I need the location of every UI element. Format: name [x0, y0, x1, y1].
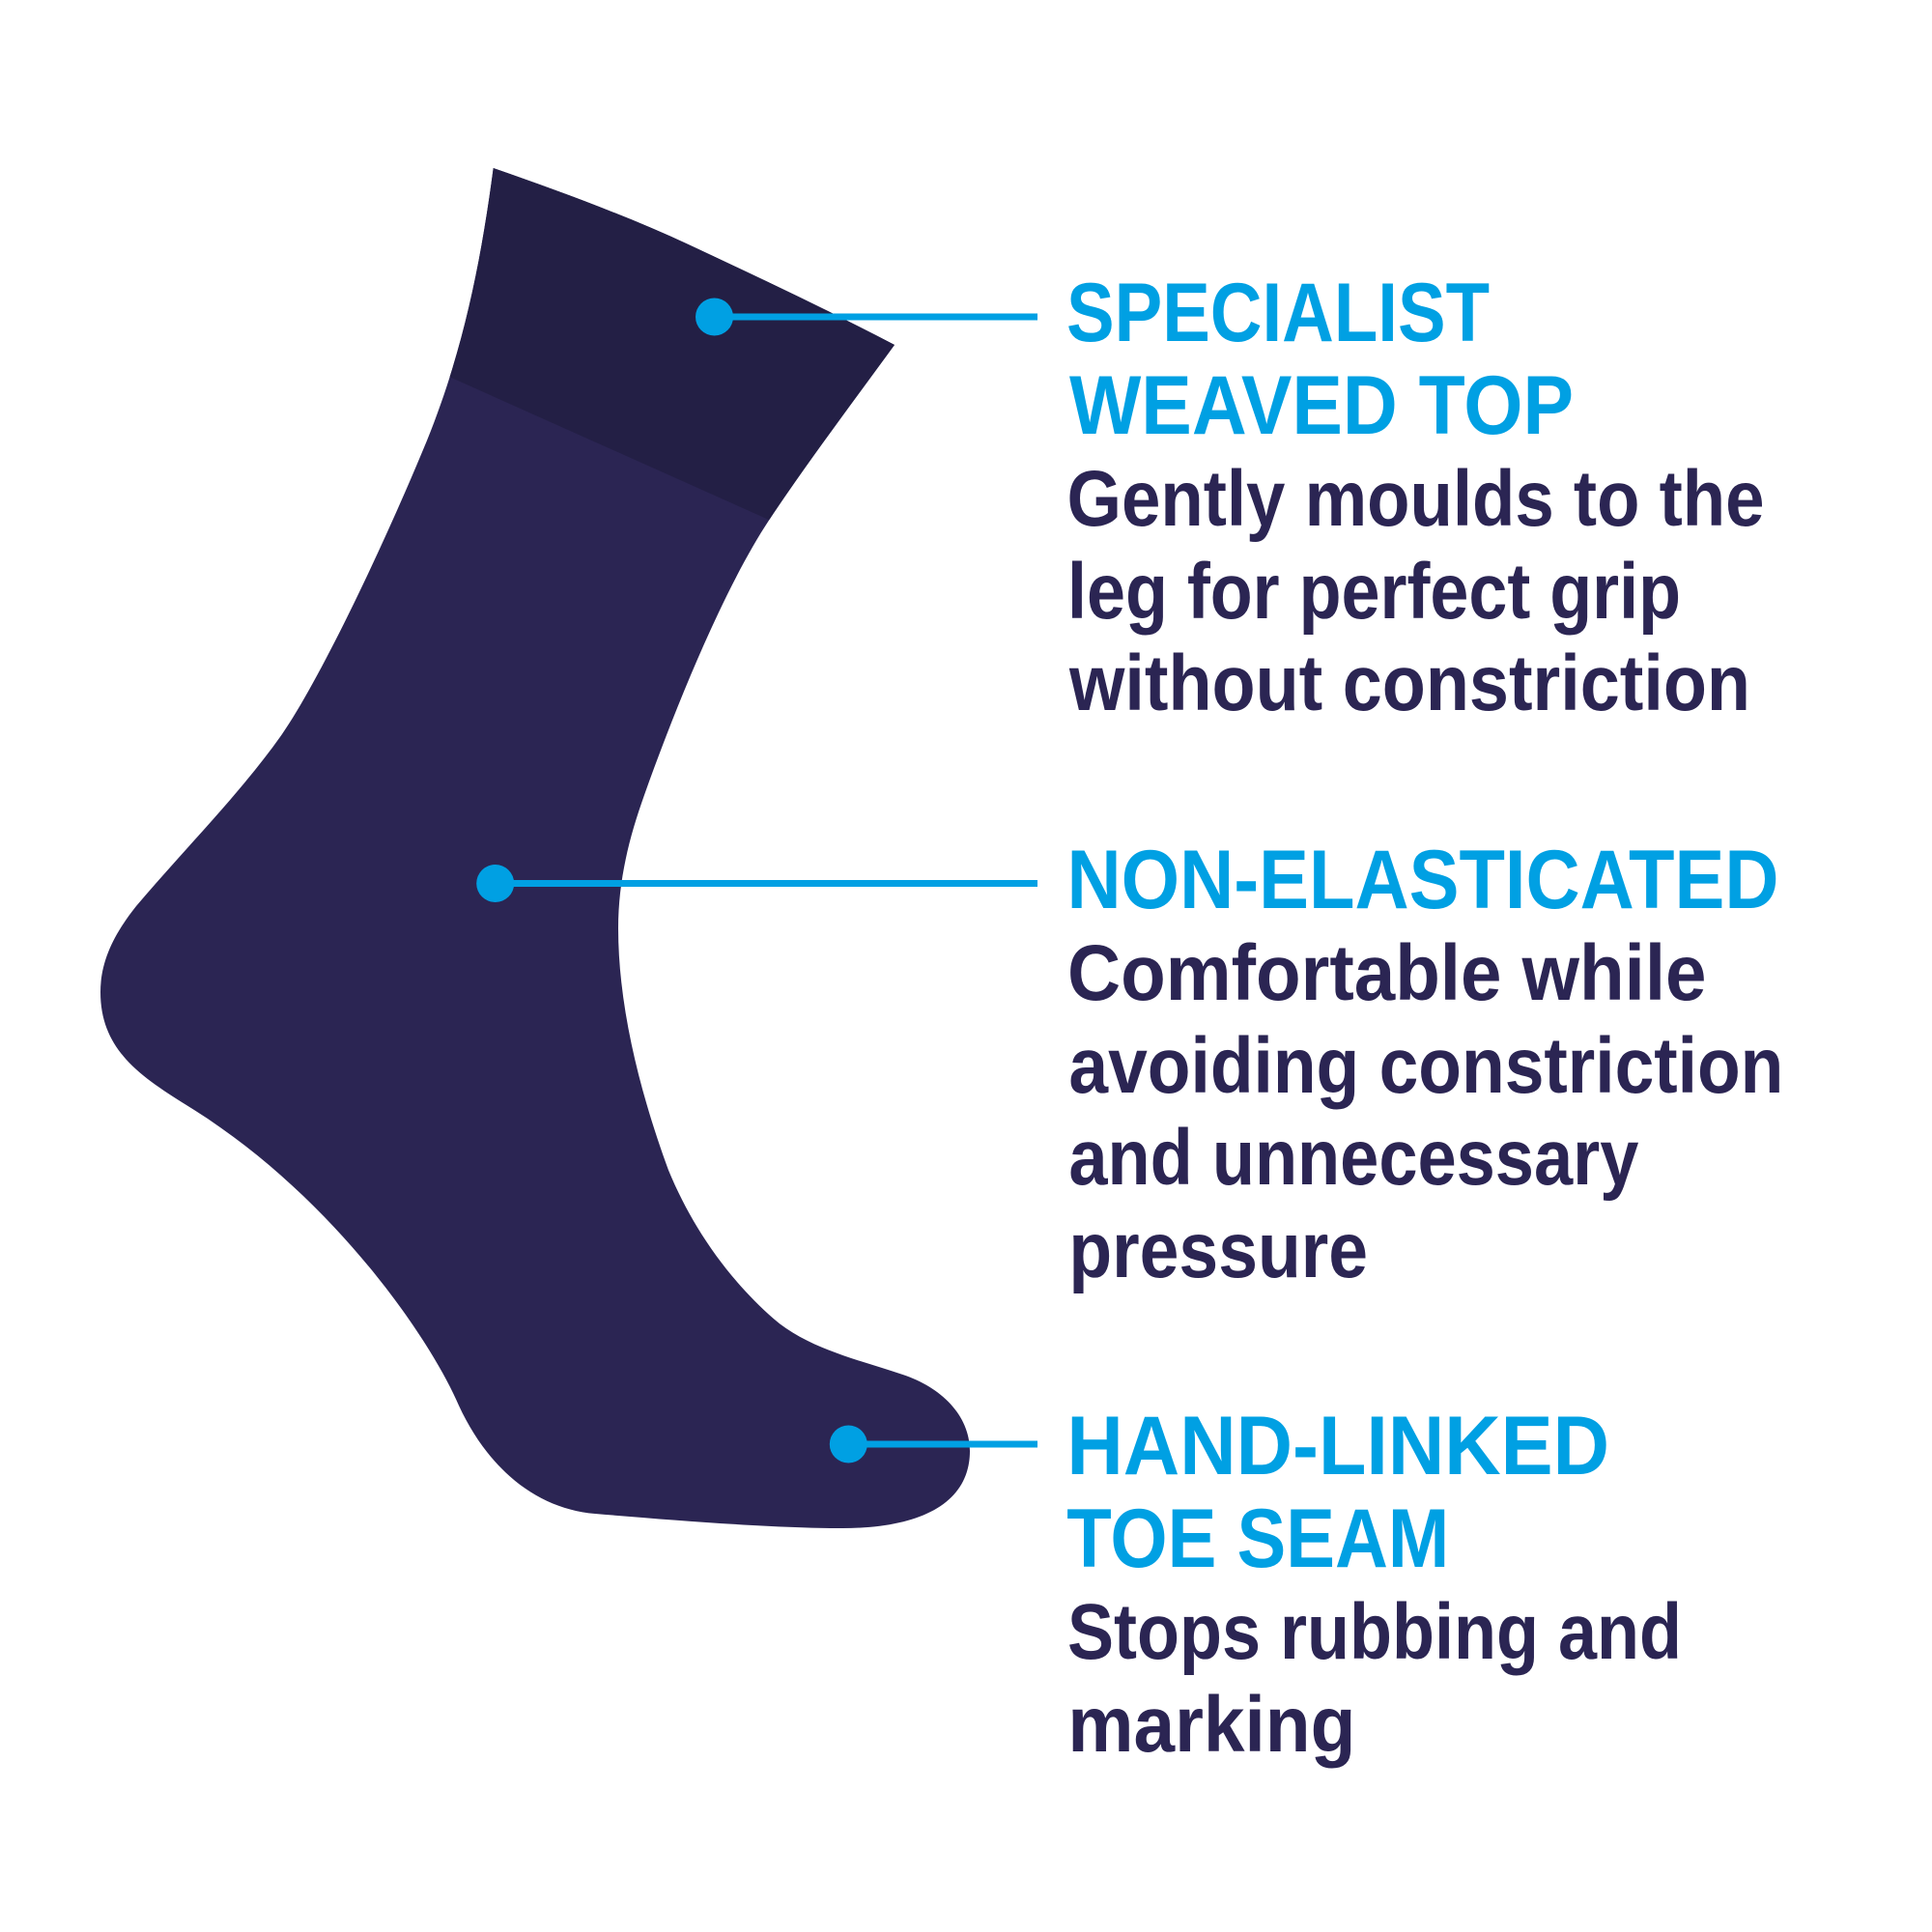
- heading: specialist weaved top: WEAVED TOP: [1069, 359, 1574, 452]
- description: weaved top: leg for perfect grip: [1067, 548, 1681, 636]
- description: weaved top: Gently moulds to the: [1066, 455, 1764, 543]
- description: non-elasticated: Comfortable while: [1067, 929, 1706, 1017]
- heading: specialist weaved top: [1066, 267, 1574, 452]
- heading: hand-linked toe seam: HAND-LINKED: [1066, 1400, 1609, 1492]
- description: non-elasticated: and unnecessary: [1068, 1114, 1639, 1202]
- sock illustration: [100, 168, 970, 1528]
- heading: non-elasticated: NON-ELASTICATED: [1066, 834, 1779, 926]
- description: toe seam: [1067, 1588, 1682, 1769]
- text block: non-elasticated: [1066, 834, 1783, 1294]
- sock body: [100, 168, 970, 1528]
- description: weaved top: [1066, 455, 1764, 727]
- description: non-elasticated: [1067, 929, 1783, 1294]
- callout pointer: toe seam: [830, 1426, 1037, 1463]
- callout pointer: non-elasticated: [476, 865, 1037, 902]
- description: non-elasticated: avoiding constriction: [1068, 1022, 1783, 1110]
- description: toe seam: Stops rubbing and: [1067, 1588, 1682, 1676]
- sock weaved top band: [450, 168, 895, 520]
- infographic canvas: [100, 168, 1779, 1768]
- text block: hand-linked toe seam: [1066, 1400, 1682, 1769]
- description: toe seam: marking: [1067, 1681, 1355, 1769]
- heading: hand-linked toe seam: [1066, 1400, 1609, 1585]
- heading: specialist weaved top: SPECIALIST: [1066, 267, 1490, 359]
- description: non-elasticated: pressure: [1068, 1207, 1368, 1294]
- heading: hand-linked toe seam: TOE SEAM: [1066, 1492, 1449, 1585]
- text block: specialist weaved top: [1066, 267, 1764, 727]
- callout pointer: weaved top: [696, 298, 1037, 336]
- description: weaved top: without constriction: [1068, 639, 1750, 727]
